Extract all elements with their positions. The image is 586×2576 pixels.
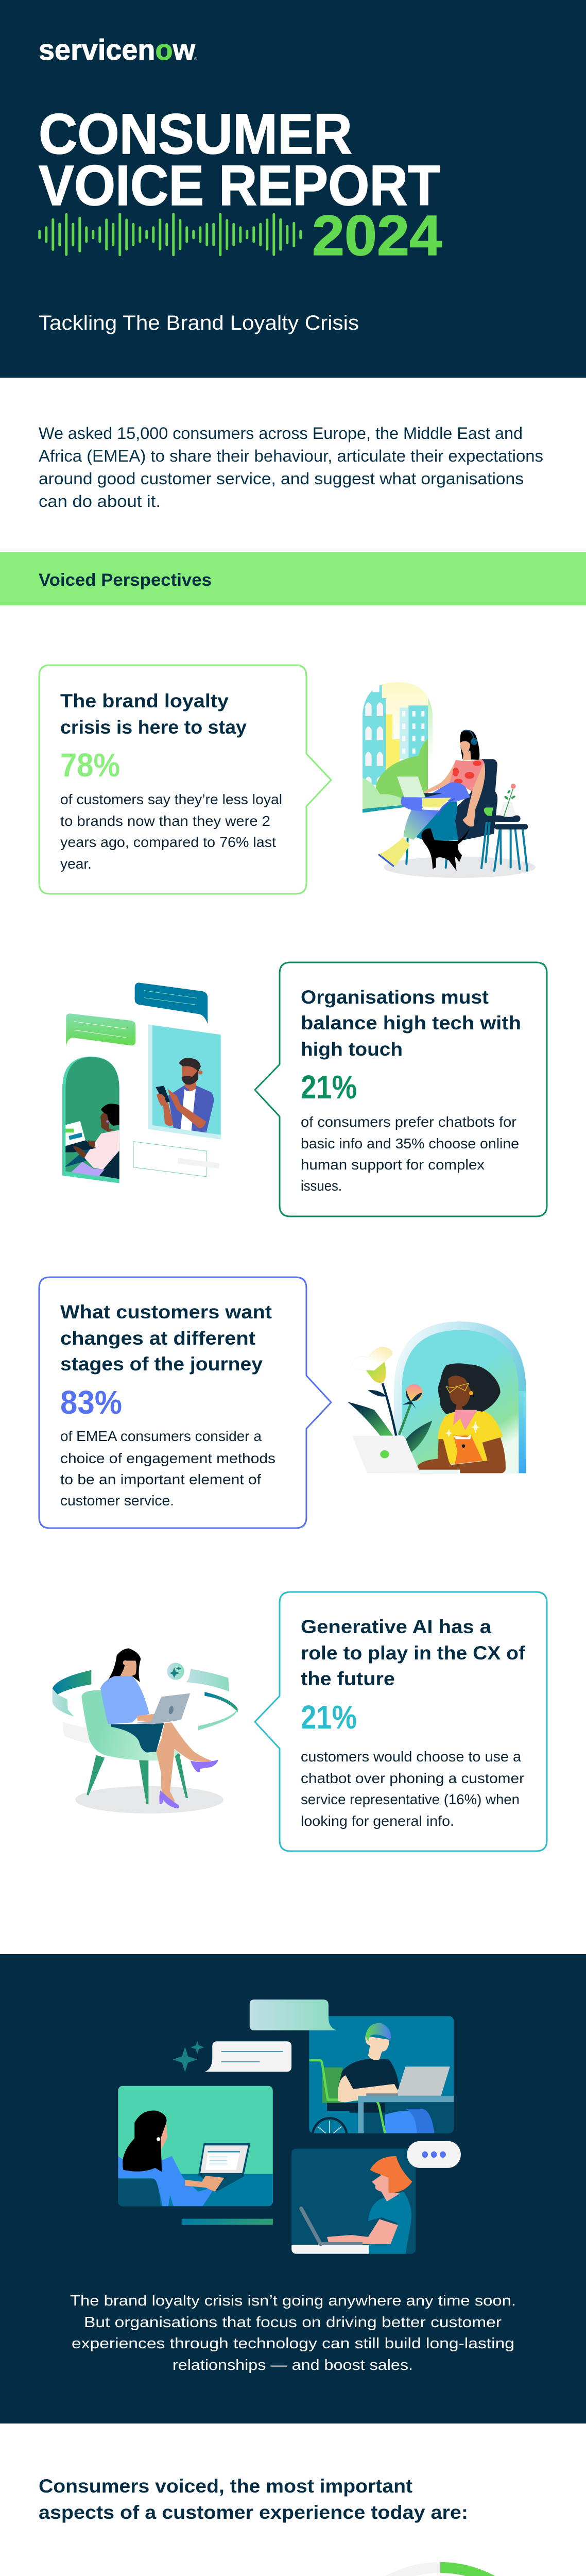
body text: service representative (16%) when xyxy=(301,1791,520,1807)
heading xyxy=(301,987,521,1060)
body text: choice of engagement methods xyxy=(60,1450,275,1466)
heading: Organisations must xyxy=(301,987,489,1008)
band: Voiced Perspectives: Voiced Perspectives xyxy=(39,570,212,590)
closing message: relationships — and boost sales. xyxy=(173,2357,413,2374)
stat 83%: 83% xyxy=(60,1384,122,1421)
heading: important aspects: Consumers voiced, the most important xyxy=(39,2476,412,2497)
body text xyxy=(301,1114,519,1194)
body text xyxy=(60,1428,275,1509)
body text: looking for general info. xyxy=(301,1813,454,1829)
logo: ServiceNow: servicenow xyxy=(39,33,196,66)
intro paragraph: Africa (EMEA) to share their behaviour, articulate their expectations xyxy=(39,447,543,465)
side tables with cup and vase xyxy=(481,784,528,871)
chat bubble: white with lines xyxy=(205,2041,291,2072)
intro paragraph xyxy=(39,424,543,511)
window with city view xyxy=(363,682,433,815)
waveform graphic xyxy=(40,214,301,255)
intro paragraph: We asked 15,000 consumers across Europe, the Middle East and xyxy=(39,424,523,443)
chair xyxy=(81,1690,188,1804)
body text: customer service. xyxy=(60,1493,174,1509)
woman with laptop xyxy=(100,1648,218,1808)
arch backdrop xyxy=(394,1321,526,1473)
heading: the future xyxy=(301,1668,395,1689)
sparkle stars xyxy=(173,2041,204,2072)
body text xyxy=(60,791,282,872)
cat xyxy=(421,828,470,871)
heading: changes at different xyxy=(60,1328,255,1349)
body text: of customers say they’re less loyal xyxy=(60,791,282,807)
body text: years ago, compared to 76% last xyxy=(60,834,276,850)
sparkle badge xyxy=(167,1663,184,1680)
body text: customers would choose to use a xyxy=(301,1749,521,1765)
radial chart xyxy=(331,2568,550,2576)
body text: to be an important element of xyxy=(60,1471,261,1487)
chat bubble: mint xyxy=(250,1999,337,2030)
heading: Generative AI has a xyxy=(301,1616,491,1637)
logo: ServiceNow: ® xyxy=(194,57,197,61)
panel: brand loyalty crisis xyxy=(39,665,331,894)
panel: high tech with high touch xyxy=(255,962,547,1216)
ribbons xyxy=(53,1669,238,1747)
stat 21%: 21% xyxy=(301,1069,357,1106)
band: Voiced Perspectives xyxy=(0,552,586,605)
heading: What customers want xyxy=(60,1301,272,1323)
panel: generative AI xyxy=(255,1592,547,1851)
video panel: man in wheelchair xyxy=(309,2016,454,2133)
person xyxy=(378,730,485,867)
closing message xyxy=(70,2293,516,2374)
intro paragraph: can do about it. xyxy=(39,492,161,511)
woman xyxy=(417,1363,506,1473)
subtitle: Tackling The Brand Loyalty Crisis xyxy=(39,312,359,334)
green chat bubble xyxy=(66,1013,135,1046)
illustration: three video call participants xyxy=(118,1999,461,2254)
closing message: experiences through technology can still build long-lasting xyxy=(72,2335,514,2352)
heading: high touch xyxy=(301,1039,403,1060)
body text: of EMEA consumers consider a xyxy=(60,1428,262,1444)
heading: important aspects: aspects of a customer experience today are: xyxy=(39,2502,468,2523)
heading: stages of the journey xyxy=(60,1353,263,1375)
heading: important aspects xyxy=(39,2476,468,2523)
illustration: woman on chair with ribbons xyxy=(53,1648,238,1814)
empty outline frame xyxy=(133,1142,219,1177)
closing message: The brand loyalty crisis isn’t going anywhere any time soon. xyxy=(70,2293,516,2309)
illustration: woman in armchair with cat by window xyxy=(363,682,536,878)
body text: chatbot over phoning a customer xyxy=(301,1770,524,1786)
title: VOICE REPORT xyxy=(39,154,440,217)
heading xyxy=(301,1616,526,1689)
window: man with phone xyxy=(148,1024,221,1140)
illustration: people chatting in windows xyxy=(62,982,221,1183)
body text xyxy=(301,1749,524,1829)
body text: year. xyxy=(60,856,92,872)
body text: of consumers prefer chatbots for xyxy=(301,1114,516,1130)
closing message: But organisations that focus on driving better customer xyxy=(84,2314,502,2331)
body text: issues. xyxy=(301,1178,342,1194)
heading xyxy=(60,690,247,738)
arched window: woman at laptop xyxy=(62,1057,119,1183)
stat 21%: 21% xyxy=(301,1699,357,1736)
teal chat bubble xyxy=(135,982,208,1024)
heading: crisis is here to stay xyxy=(60,717,247,738)
laptop xyxy=(352,1436,460,1473)
gradient bar xyxy=(182,2219,273,2225)
typing indicator bubble xyxy=(407,2141,461,2168)
heading: role to play in the CX of xyxy=(301,1642,526,1664)
video panel: woman with red hair xyxy=(291,2148,416,2254)
intro paragraph: around good customer service, and suggest what organisations xyxy=(39,469,524,488)
body text: basic info and 35% choose online xyxy=(301,1136,519,1151)
video panel: woman with long hair xyxy=(118,2086,273,2207)
body text: to brands now than they were 2 xyxy=(60,813,270,829)
armchair xyxy=(406,759,497,868)
dark panel: brand loyalty message xyxy=(0,1954,586,2424)
header panel xyxy=(0,0,586,378)
body text: human support for complex xyxy=(301,1157,485,1173)
heading: balance high tech with xyxy=(301,1012,521,1033)
heading: The brand loyalty xyxy=(60,690,229,711)
heading xyxy=(60,1301,272,1375)
flowers xyxy=(348,1347,432,1452)
stat 78%: 78% xyxy=(60,747,120,784)
panel: customers want changes across the journey xyxy=(39,1277,331,1528)
title xyxy=(39,103,440,217)
title: CONSUMER xyxy=(39,103,352,166)
illustration: woman at laptop with flowers xyxy=(348,1321,526,1473)
year 2024: 2024 xyxy=(312,204,442,267)
